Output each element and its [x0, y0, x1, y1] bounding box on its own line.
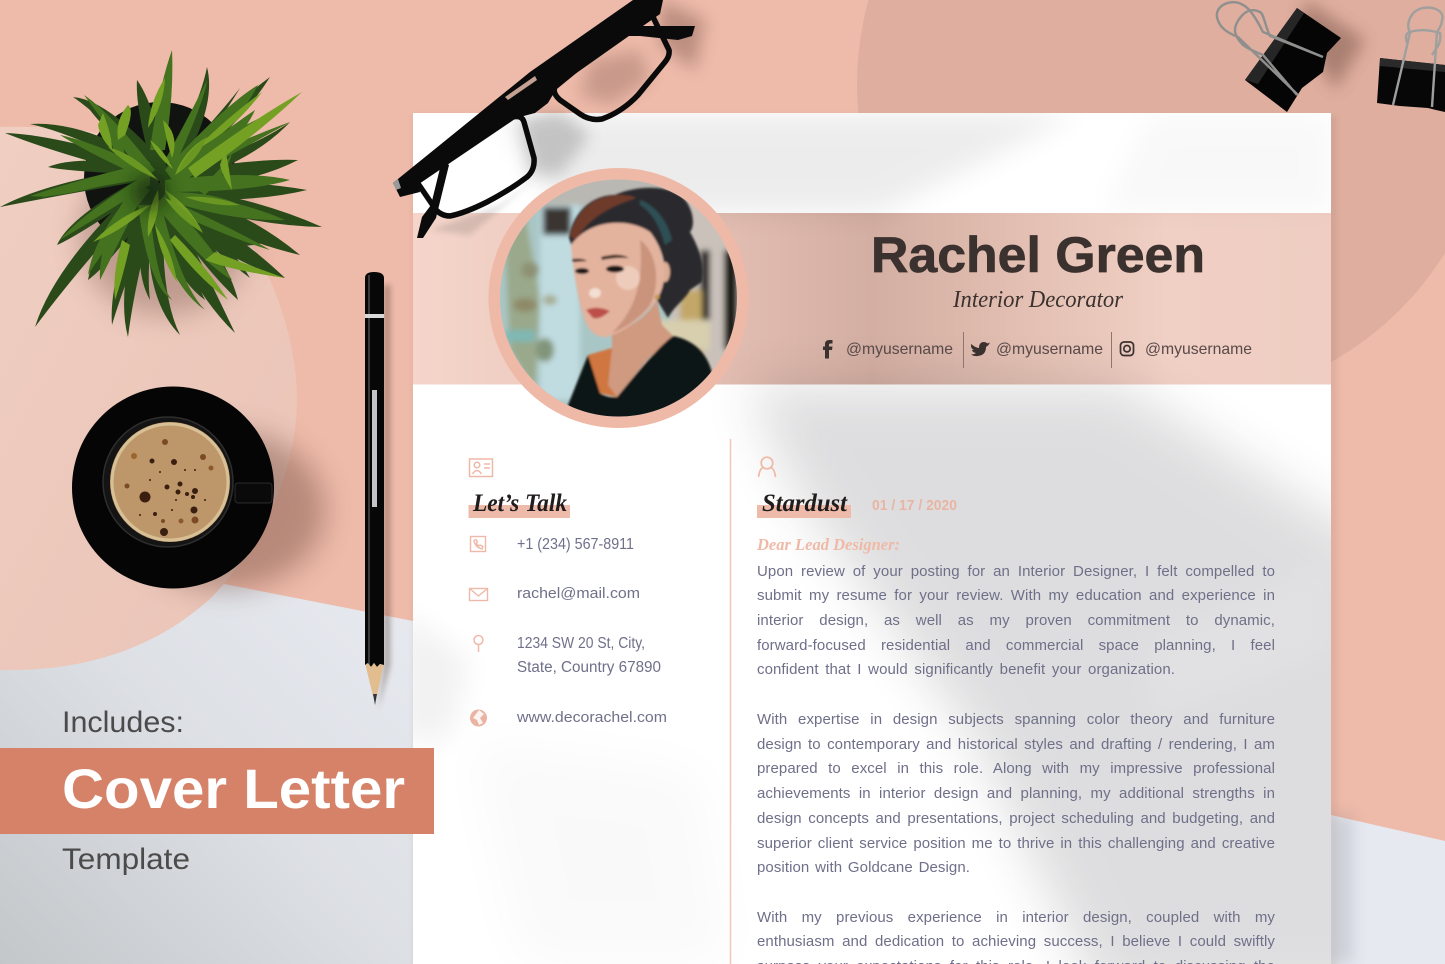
plant front leaves	[110, 137, 240, 233]
name: Rachel Green	[871, 227, 1205, 283]
glasses right lens frame	[554, 14, 669, 119]
background: darker circle top right	[857, 0, 1445, 403]
contact: address: 1234 SW 20 St, City,	[517, 635, 645, 652]
pencil shadow	[378, 285, 390, 710]
letter body text	[757, 563, 1275, 964]
clip shadow	[1300, 0, 1365, 90]
contact: email: rachel@mail.com	[517, 585, 640, 602]
eyes	[575, 268, 589, 274]
coffee shadow	[125, 430, 325, 590]
divider	[730, 439, 732, 964]
glasses shadow	[520, 110, 590, 175]
plant dark leaves	[0, 67, 322, 337]
contact: website: www.decorachel.com	[516, 709, 667, 726]
paper sheet	[400, 113, 1400, 964]
pencil body	[365, 272, 384, 667]
clip wire	[1217, 2, 1323, 95]
icon: twitter	[971, 342, 990, 356]
letter body text: design concepts and presentations, project scheduling and budgeting, and	[757, 810, 1275, 827]
letter body text: design to contemporary and historical styles and drafting / rendering, I am	[757, 736, 1275, 753]
glasses top bar	[393, 0, 663, 197]
letter body text: position with Goldcane Design.	[757, 859, 970, 876]
heading: let's talk: Let’s Talk	[472, 490, 567, 517]
glasses	[393, 0, 705, 238]
letter body text: achievements in interior design and planning, my additional strengths in	[757, 785, 1275, 802]
salutation: Dear Lead Designer:	[756, 535, 900, 554]
coffee surface	[110, 422, 230, 542]
glasses far temple arm	[610, 26, 695, 40]
plant bright leaves	[93, 78, 302, 300]
earring	[654, 294, 660, 300]
portrait photo	[500, 180, 737, 416]
contact: address: State, Country 67890	[517, 659, 661, 676]
letter body text: With my previous experience in interior design, coupled with my	[757, 909, 1275, 926]
face	[571, 223, 664, 337]
letter body text: confident that I would significantly benefit your organization.	[757, 661, 1175, 678]
background: light blush blob	[0, 127, 297, 670]
icon: mail	[470, 588, 488, 600]
icon: facebook	[823, 340, 832, 358]
pencil label strip	[372, 390, 377, 507]
glasses bridge highlight	[505, 76, 537, 100]
cup handle	[235, 483, 272, 503]
clip body	[1377, 58, 1445, 112]
shirt	[566, 334, 713, 416]
letter body text: enthusiasm and dedication to achieving success, I believe I could swiftly	[757, 933, 1275, 950]
hair	[569, 188, 703, 318]
icon: phone	[470, 536, 486, 552]
plant crown shade	[132, 174, 168, 210]
icon: instagram	[1120, 342, 1134, 356]
brows	[572, 255, 629, 262]
glasses left lens frame	[417, 117, 534, 216]
coffee cup	[72, 386, 325, 590]
pencil band	[365, 314, 384, 318]
paper sheet body	[413, 113, 1331, 964]
job title: Interior Decorator	[952, 287, 1124, 313]
banner: cover letter	[0, 748, 434, 834]
pencil	[365, 272, 390, 710]
letter body text: forward-focused residential and commercial space planning, I feel	[757, 637, 1275, 654]
icon: globe	[470, 710, 487, 726]
paper light and shade	[400, 113, 1400, 964]
icon: location pin	[474, 636, 483, 652]
saucer	[72, 386, 274, 588]
ear	[660, 262, 670, 282]
social handle: facebook: @myusername	[846, 341, 953, 358]
social dividers	[964, 332, 1112, 368]
pencil lead	[373, 694, 377, 705]
background: grey lower panel left	[0, 540, 413, 964]
icon: id card	[470, 459, 492, 476]
header band	[413, 213, 1331, 384]
clip wire	[1393, 8, 1443, 107]
glasses near temple arm	[417, 160, 449, 238]
letter body text: submit my resume for your review. With my education and experience in	[757, 587, 1275, 604]
underline: let's talk	[468, 505, 570, 518]
plant mid leaves	[30, 50, 290, 310]
letter body text: superior client service position me to thrive in this challenging and creative	[757, 834, 1275, 852]
plant	[0, 50, 322, 337]
paper shadow	[413, 116, 1337, 964]
underline: stardust	[757, 505, 851, 518]
contact: phone: +1 (234) 567-8911	[517, 536, 634, 553]
letter body text: Upon review of your posting for an Interior Designer, I felt compelled to	[757, 563, 1275, 580]
cup rim	[103, 417, 233, 547]
photo background	[500, 180, 737, 416]
binder clip right	[1377, 8, 1445, 112]
text: includes: Includes:	[62, 706, 184, 739]
clip body	[1245, 8, 1341, 112]
heading: stardust: Stardust	[762, 490, 848, 517]
heading: cover letter: Cover Letter	[62, 757, 405, 820]
text: template: Template	[62, 843, 190, 876]
plant shadow	[80, 155, 250, 315]
neck and chest	[588, 300, 673, 397]
contact: address	[517, 635, 661, 676]
social handle: twitter: @myusername	[996, 341, 1103, 358]
background: grey lower panel right	[1331, 815, 1445, 964]
icon: person	[758, 457, 776, 477]
plant pot	[84, 102, 236, 254]
lips	[586, 308, 610, 318]
social handle: instagram: @myusername	[1145, 341, 1252, 358]
photo ring	[488, 168, 748, 428]
letter body text: With expertise in design subjects spanning color theory and furniture	[757, 711, 1275, 728]
letter body text: interior design, as well as my proven commitment to dynamic,	[757, 612, 1275, 629]
date: 01 / 17 / 2020	[872, 497, 957, 514]
letter body text: prepared to excel in this role. Along with my impressive professional	[757, 760, 1275, 777]
binder clip left	[1217, 0, 1365, 112]
pencil wood tip	[366, 663, 384, 696]
coffee bubbles	[124, 439, 214, 536]
